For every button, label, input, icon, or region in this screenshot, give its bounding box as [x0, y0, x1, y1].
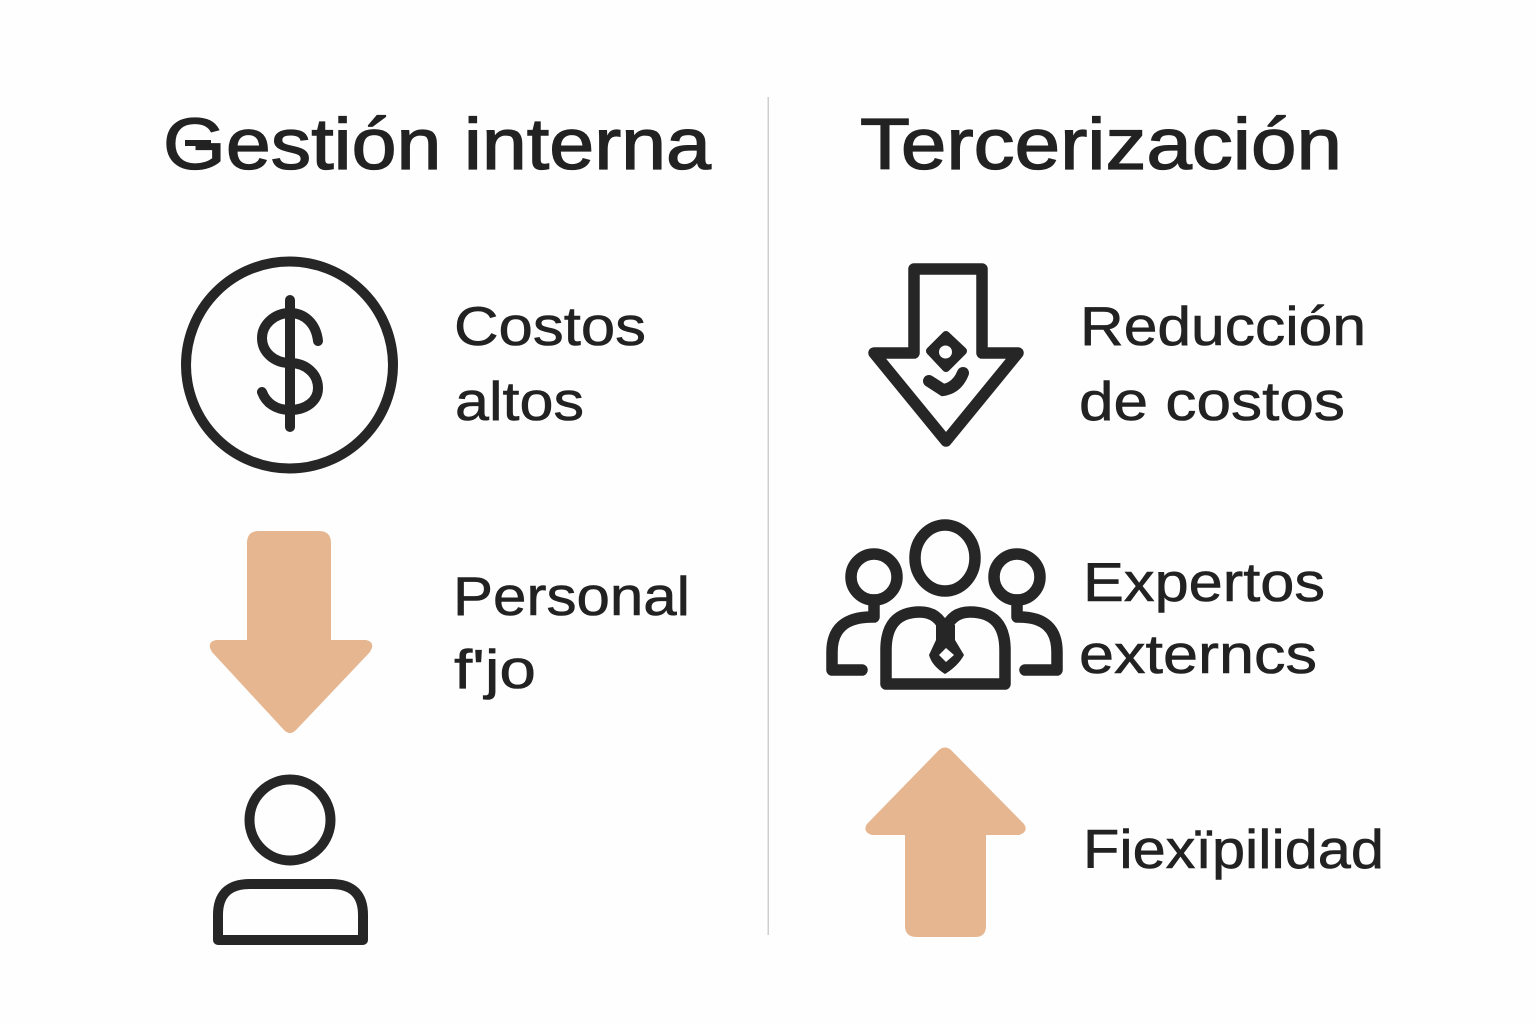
heading: Tercerización: Tercerización	[860, 105, 1342, 185]
text: Expertos externos: Expertos	[1083, 551, 1325, 613]
text: Personal fijo: Personal	[453, 565, 690, 627]
text: Costos altos	[454, 295, 646, 432]
arrow: peach up arrow	[865, 748, 1026, 937]
text: Costos altos: Costos	[454, 295, 646, 357]
panel: gestión interna	[163, 105, 712, 940]
icon: cost reduction arrow	[874, 269, 1018, 441]
text: Reducción de costos: Reducción	[1080, 295, 1366, 357]
heading: Gestión interna: Gestión interna	[163, 105, 712, 185]
text: Flexibilidad: Fiexïpilidad	[1083, 818, 1384, 880]
icon: dollar coin	[186, 262, 393, 468]
arrow: peach down arrow	[210, 531, 372, 733]
text: Personal fijo: f'jo	[454, 638, 536, 700]
text: Reducción de costos: de costos	[1079, 370, 1345, 432]
panel: tercerización	[832, 105, 1384, 937]
text: Expertos externos: externcs	[1079, 623, 1317, 685]
icon: group of experts	[832, 525, 1057, 684]
text: Expertos externos	[1079, 551, 1325, 685]
text: Costos altos: altos	[455, 370, 584, 432]
text: Personal fijo	[453, 565, 690, 700]
text: Reducción de costos	[1079, 295, 1366, 432]
icon: person	[218, 780, 363, 940]
